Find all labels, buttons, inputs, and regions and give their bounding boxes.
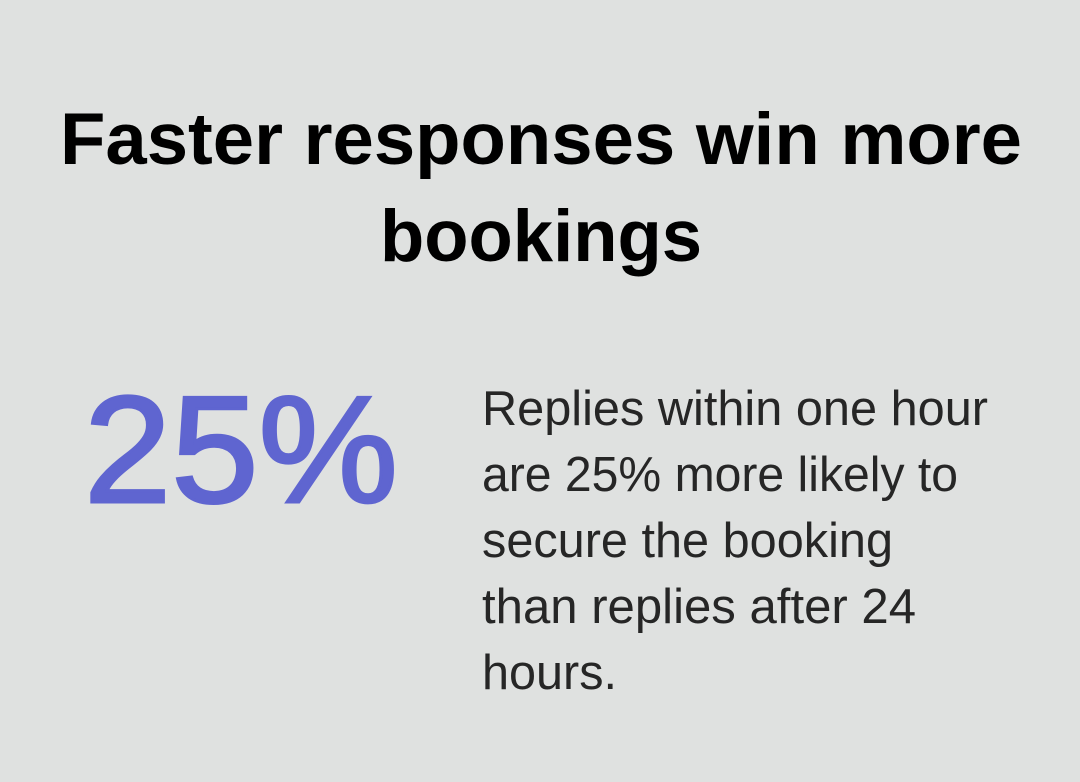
description text: hours. <box>482 646 617 700</box>
title <box>60 99 1022 277</box>
title: Faster responses win more <box>60 99 1022 180</box>
description text <box>482 382 988 700</box>
description text: are 25% more likely to <box>482 448 958 502</box>
description text: than replies after 24 <box>482 580 916 634</box>
description text: Replies within one hour <box>482 382 988 436</box>
title: bookings <box>380 196 702 277</box>
big statistic: 25%: 25% <box>84 365 398 535</box>
description text: secure the booking <box>482 514 893 568</box>
